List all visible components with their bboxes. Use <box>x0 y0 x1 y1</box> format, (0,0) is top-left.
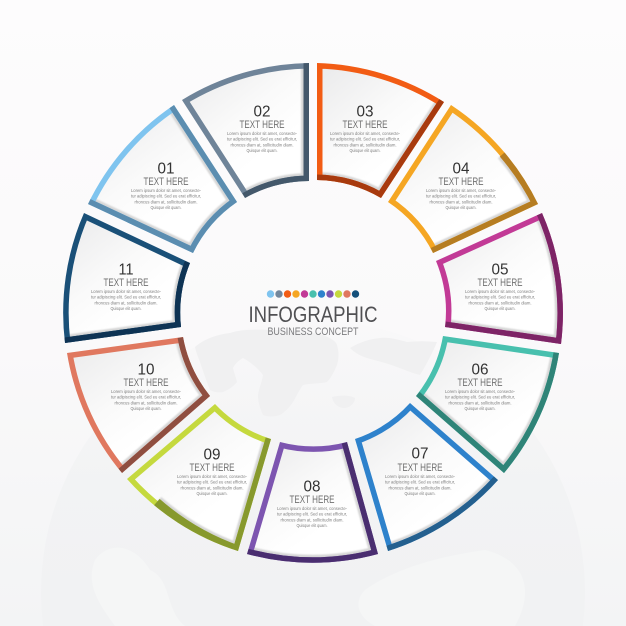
heading 10: TEXT HERE <box>124 377 168 389</box>
body text 03: rhoncus diam at, sollicitudin diam. <box>334 142 396 148</box>
globe backdrop <box>41 320 585 626</box>
body text 10: rhoncus diam at, sollicitudin diam. <box>114 400 178 406</box>
body text 04: Lorem ipsum dolor sit amet, consecte- <box>426 188 496 194</box>
panel: 09 <box>127 404 271 551</box>
heading 07: TEXT HERE <box>398 462 442 474</box>
number 11: 11 <box>118 262 134 278</box>
panel: 04 <box>388 105 538 253</box>
title: INFOGRAPHIC <box>248 302 378 327</box>
body text 02: Quisque elit quam. <box>246 148 278 154</box>
body text 08: Quisque elit quam. <box>296 523 328 529</box>
body text 07: Quisque elit quam. <box>404 491 436 497</box>
body text 10: Quisque elit quam. <box>130 406 162 412</box>
world map <box>195 330 437 416</box>
body text 10: tur adipiscing elit. Sed eu erat efficitur, <box>111 395 181 401</box>
body text 01: Lorem ipsum dolor sit amet, consecte- <box>131 188 201 194</box>
body text 07: Lorem ipsum dolor sit amet, consecte- <box>385 474 455 480</box>
body text 11: Quisque elit quam. <box>110 306 142 312</box>
body text 04 <box>426 188 496 211</box>
number 10: 10 <box>138 362 155 378</box>
body text 09: rhoncus diam at, sollicitudin diam. <box>180 485 244 491</box>
body text 05: Quisque elit quam. <box>484 306 516 312</box>
panel: 02 <box>182 63 309 198</box>
body text 01: rhoncus diam at, sollicitudin diam. <box>134 199 198 205</box>
heading 08: TEXT HERE <box>290 494 334 506</box>
number 02: 02 <box>254 104 270 120</box>
number 06: 06 <box>472 362 488 378</box>
number 07: 07 <box>412 446 428 462</box>
body text 08: rhoncus diam at, sollicitudin diam. <box>280 517 344 523</box>
body text 03: Lorem ipsum dolor sit amet, consecte- <box>330 131 400 137</box>
heading 01: TEXT HERE <box>144 176 188 188</box>
number 04: 04 <box>452 160 470 178</box>
body text 05: Lorem ipsum dolor sit amet, consecte- <box>465 289 535 295</box>
body text 01: tur adipiscing elit. Sed eu erat efficitur, <box>131 194 201 200</box>
heading 05: TEXT HERE <box>478 277 522 289</box>
panel: 07 <box>355 403 498 551</box>
body text 06: Lorem ipsum dolor sit amet, consecte- <box>445 389 515 395</box>
panel: 11 <box>63 213 190 343</box>
body text 04: rhoncus diam at, sollicitudin diam. <box>430 199 492 205</box>
body text 11: tur adipiscing elit. Sed eu erat efficitur, <box>91 295 161 301</box>
body text 11: Lorem ipsum dolor sit amet, consecte- <box>91 289 161 295</box>
body text 09: tur adipiscing elit. Sed eu erat efficitur, <box>177 480 247 486</box>
number 09: 09 <box>204 446 220 464</box>
body text 04: Quisque elit quam. <box>446 205 476 211</box>
number 08: 08 <box>304 478 320 496</box>
heading 11: TEXT HERE <box>104 277 148 289</box>
body text 08: tur adipiscing elit. Sed eu erat efficitur, <box>277 512 347 518</box>
heading 02: TEXT HERE <box>240 119 284 131</box>
body text 05: tur adipiscing elit. Sed eu erat efficitur, <box>465 295 535 301</box>
heading 03: TEXT HERE <box>342 119 388 131</box>
body text 05: rhoncus diam at, sollicitudin diam. <box>468 300 532 306</box>
body text 06: tur adipiscing elit. Sed eu erat efficitur, <box>445 395 515 401</box>
body text 03: Quisque elit quam. <box>350 148 380 154</box>
panel: 05 <box>436 213 563 344</box>
body text 08: Lorem ipsum dolor sit amet, consecte- <box>277 506 347 512</box>
body text 08 <box>277 506 347 529</box>
body text 10: Lorem ipsum dolor sit amet, consecte- <box>111 389 181 395</box>
panel: 01 <box>88 105 237 253</box>
panel: 03 <box>317 63 444 198</box>
body text 06 <box>445 389 515 412</box>
body text 06: Quisque elit quam. <box>464 406 496 412</box>
heading 09: TEXT HERE <box>190 462 234 474</box>
panel: 08 <box>247 442 378 563</box>
body text 03: tur adipiscing elit. Sed eu erat efficitur, <box>330 137 400 143</box>
body text 10 <box>111 389 181 412</box>
subtitle: BUSINESS CONCEPT <box>268 326 359 338</box>
body text 09: Lorem ipsum dolor sit amet, consecte- <box>177 474 247 480</box>
body text 11 <box>91 289 161 312</box>
body text 02: tur adipiscing elit. Sed eu erat efficitur, <box>227 137 297 143</box>
body text 07 <box>385 474 455 497</box>
body text 02 <box>227 131 297 154</box>
body text 04: tur adipiscing elit. Sed eu erat efficitur, <box>426 194 496 200</box>
number 05: 05 <box>492 262 508 278</box>
body text 02: rhoncus diam at, sollicitudin diam. <box>230 142 294 148</box>
body text 03 <box>330 131 400 154</box>
number 03: 03 <box>356 104 374 120</box>
heading 06: TEXT HERE <box>458 377 502 389</box>
body text 02: Lorem ipsum dolor sit amet, consecte- <box>227 131 297 137</box>
colour dots <box>267 290 359 298</box>
panel: 06 <box>416 336 559 473</box>
panel: 10 <box>67 337 210 473</box>
body text 07: rhoncus diam at, sollicitudin diam. <box>388 485 452 491</box>
body text 07: tur adipiscing elit. Sed eu erat efficitur, <box>385 480 455 486</box>
body text 11: rhoncus diam at, sollicitudin diam. <box>94 300 158 306</box>
body text 05 <box>465 289 535 312</box>
body text 09: Quisque elit quam. <box>196 491 228 497</box>
body text 09 <box>177 474 247 497</box>
heading 04: TEXT HERE <box>438 176 484 188</box>
body text 06: rhoncus diam at, sollicitudin diam. <box>448 400 512 406</box>
body text 01: Quisque elit quam. <box>150 205 182 211</box>
body text 01 <box>131 188 201 211</box>
number 01: 01 <box>158 160 174 178</box>
